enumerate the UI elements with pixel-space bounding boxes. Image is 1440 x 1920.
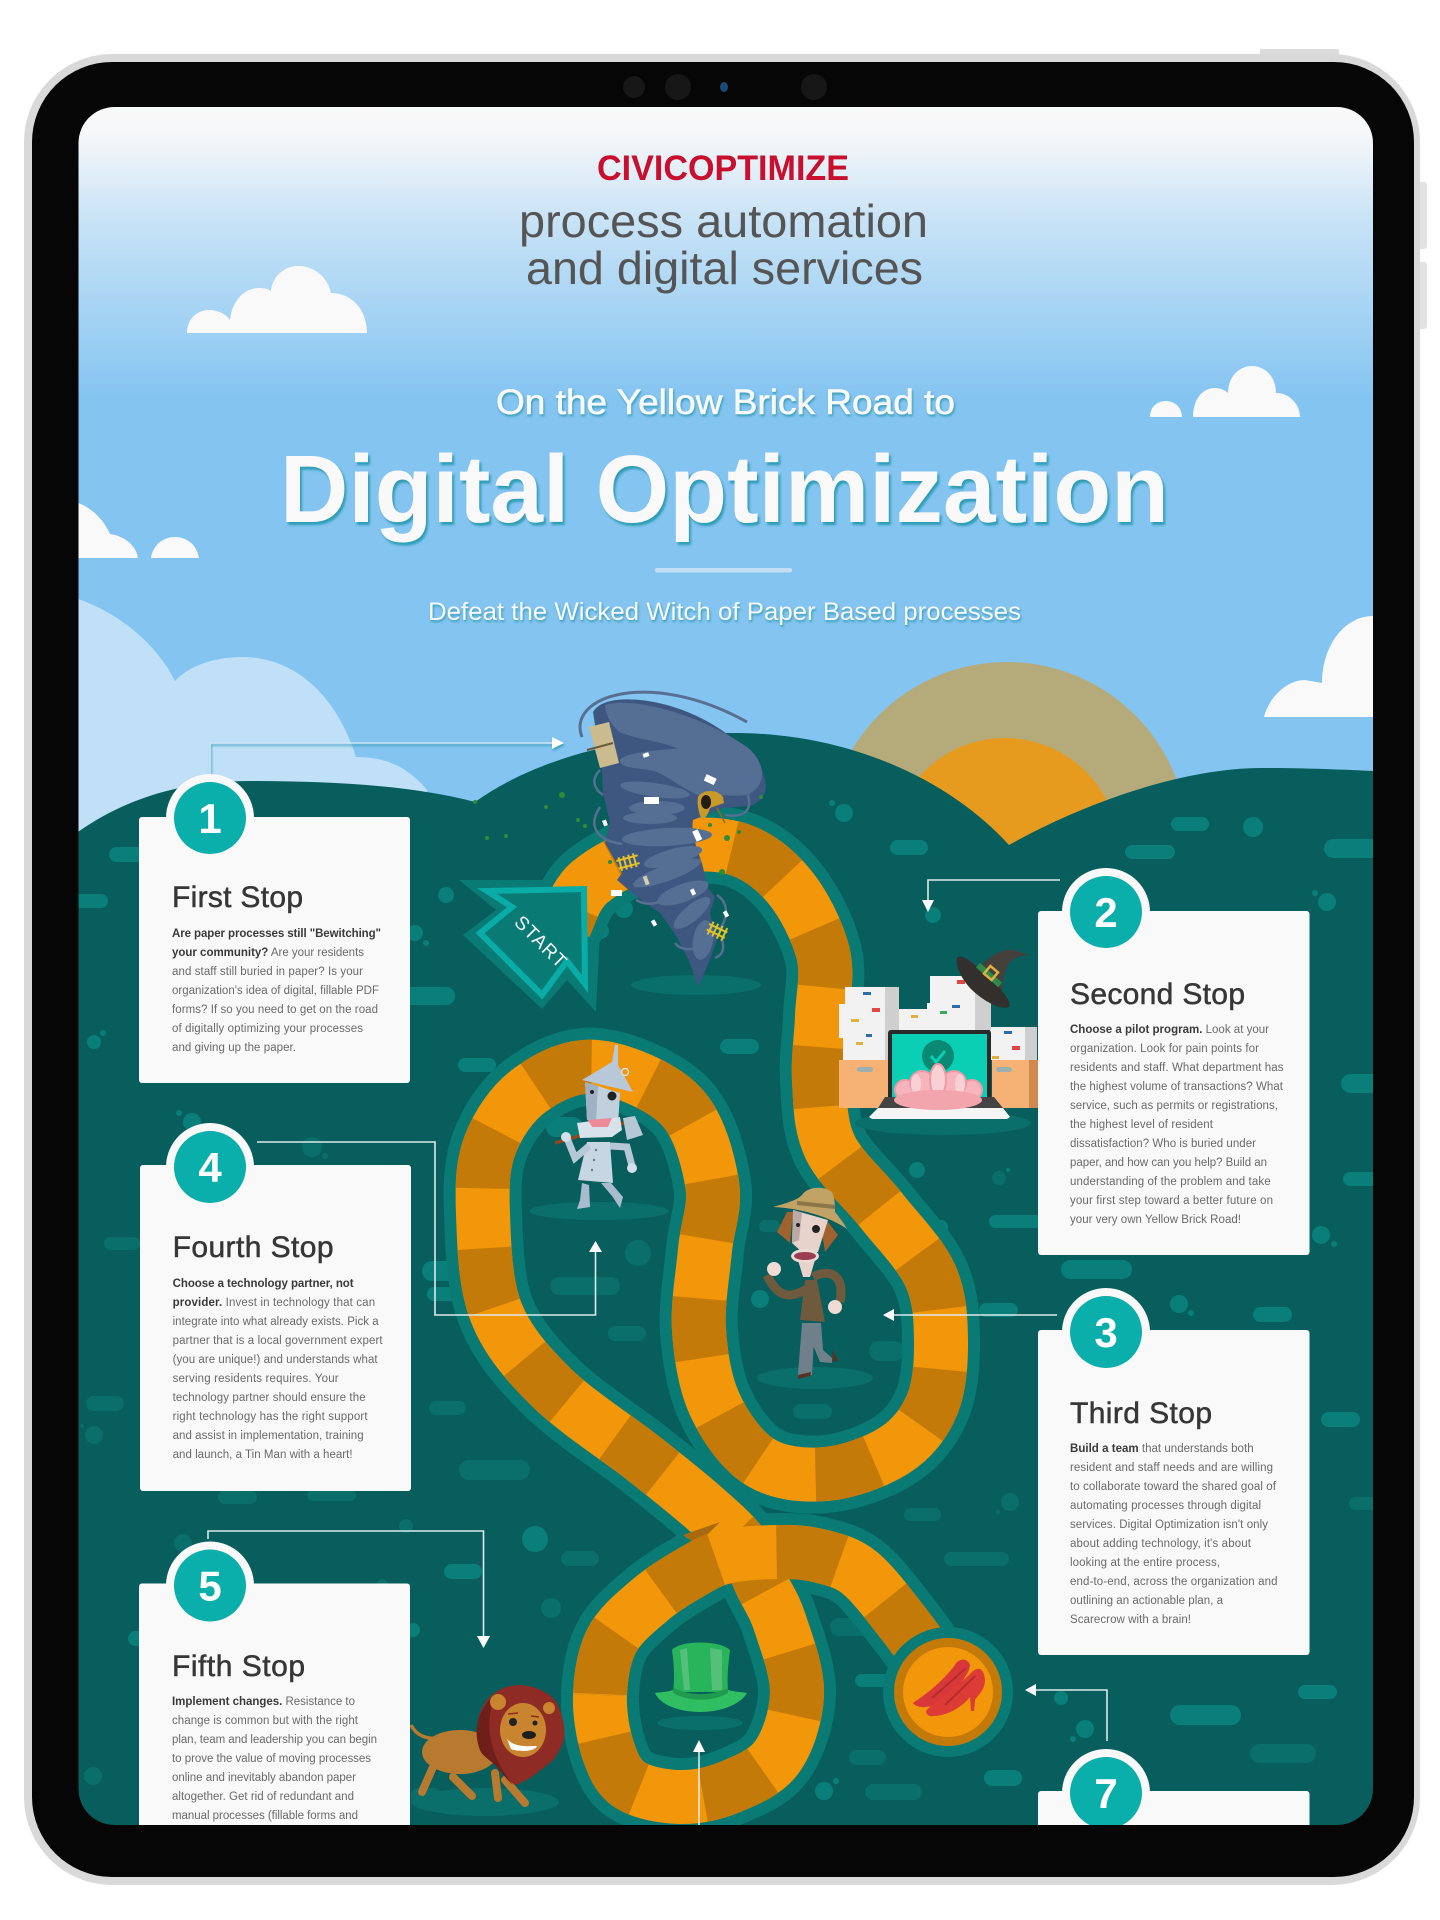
body text: and launch, a Tin Man with a heart! <box>173 1449 353 1461</box>
body text: Implement changes. Resistance to <box>172 1696 355 1708</box>
tagline: process automation <box>519 195 928 247</box>
body text: altogether. Get rid of redundant and <box>172 1791 354 1803</box>
body text <box>1070 1443 1278 1626</box>
tagline <box>519 195 928 294</box>
yellow brick road <box>483 844 948 1797</box>
start label: START <box>510 912 571 973</box>
file boxes <box>839 1060 888 1108</box>
badge 1: 1 <box>198 795 222 842</box>
body text: integrate into what already exists. Pick a <box>173 1316 379 1328</box>
funnel hat <box>582 1045 633 1092</box>
title divider <box>655 568 792 572</box>
green hills <box>78 733 1373 1825</box>
tiara <box>894 1064 982 1110</box>
heading: Third Stop <box>1070 1397 1212 1430</box>
arrow: first stop <box>210 737 564 775</box>
body text: to collaborate toward the shared goal of <box>1070 1481 1277 1493</box>
body text: looking at the entire process, <box>1070 1557 1220 1569</box>
icon: ruby slippers <box>913 1660 985 1716</box>
badge 1 <box>174 782 246 854</box>
pre-title: On the Yellow Brick Road to <box>496 383 955 422</box>
heading: Fifth Stop <box>172 1650 305 1683</box>
legs <box>422 1767 525 1803</box>
badge 2: 2 <box>1094 889 1118 936</box>
body text: the highest level of resident <box>1070 1119 1214 1131</box>
paper scraps <box>602 752 729 927</box>
paper stacks <box>839 976 1025 1060</box>
witch hat <box>957 950 1029 1008</box>
flying bucket <box>698 791 725 823</box>
body text: technology partner should ensure the <box>173 1392 366 1404</box>
body text: online and inevitably abandon paper <box>172 1772 356 1784</box>
arrow: third stop <box>883 1309 1057 1321</box>
body text <box>172 928 381 1054</box>
body text: and giving up the paper. <box>172 1042 296 1054</box>
body text: outlining an actionable plan, a <box>1070 1595 1224 1607</box>
body text: provider. Invest in technology that can <box>173 1297 375 1309</box>
badge 7: 7 <box>1094 1770 1118 1817</box>
body text: Choose a technology partner, not <box>173 1278 354 1290</box>
arrow: sixth stop <box>693 1740 705 1826</box>
green top hat <box>655 1642 747 1712</box>
paper stacks and laptop <box>839 950 1038 1119</box>
body text: your very own Yellow Brick Road! <box>1070 1214 1241 1226</box>
body text: serving residents requires. Your <box>173 1373 339 1385</box>
ruby slippers stop <box>883 1627 1013 1757</box>
body text: services. Digital Optimization isn't only <box>1070 1519 1268 1531</box>
cloud mid left <box>78 503 199 558</box>
card: first stop <box>139 774 410 1083</box>
body text: Scarecrow with a brain! <box>1070 1614 1191 1626</box>
tin man <box>555 1045 643 1209</box>
body text: dissatisfaction? Who is buried under <box>1070 1138 1256 1150</box>
sun <box>852 662 1176 845</box>
body text: of digitally optimizing your processes <box>172 1023 363 1035</box>
body text: service, such as permits or registrations, <box>1070 1100 1278 1112</box>
card: third stop <box>1038 1288 1310 1655</box>
badge 3 <box>1070 1296 1142 1368</box>
start arrow <box>480 889 585 995</box>
connector arrows <box>208 737 1107 1826</box>
scarecrow <box>767 1188 847 1379</box>
coat <box>800 1280 825 1322</box>
badge 5 <box>174 1550 246 1622</box>
body text: your first step toward a better future on <box>1070 1195 1273 1207</box>
body text: change is common but with the right <box>172 1715 359 1727</box>
body text: Are paper processes still "Bewitching" <box>172 928 381 940</box>
badge 5: 5 <box>198 1562 222 1610</box>
card: seventh stop <box>1038 1749 1310 1851</box>
body text: understanding of the problem and take <box>1070 1176 1271 1188</box>
body text: (you are unique!) and understands what <box>173 1354 378 1366</box>
cloud top left <box>187 266 367 333</box>
badge 7 <box>1070 1757 1142 1829</box>
body text: resident and staff needs and are willing <box>1070 1462 1273 1474</box>
laptop <box>888 1030 991 1100</box>
arrow: second stop <box>922 880 1060 912</box>
body text: right technology has the right support <box>173 1411 368 1423</box>
card: fifth stop <box>139 1542 410 1844</box>
leaves <box>473 792 763 875</box>
cloud top right <box>1150 366 1300 417</box>
body text <box>1070 1024 1284 1226</box>
badge 4 <box>174 1131 246 1203</box>
body text: to prove the value of moving processes <box>172 1753 371 1765</box>
card: second stop <box>1038 868 1310 1255</box>
body text: and assist in implementation, training <box>173 1430 364 1442</box>
heading: Fourth Stop <box>173 1231 334 1264</box>
large pale cloud <box>78 599 427 832</box>
body <box>422 1730 498 1774</box>
arrow: seventh stop <box>1025 1684 1107 1741</box>
arms <box>767 1275 810 1295</box>
axe <box>555 1122 627 1143</box>
arms <box>567 1138 589 1158</box>
face <box>792 1210 828 1253</box>
front cameras <box>623 74 827 100</box>
flying fences <box>616 852 729 942</box>
body text <box>172 1696 377 1822</box>
hair <box>777 1212 793 1243</box>
body text: organization. Look for pain points for <box>1070 1043 1259 1055</box>
ground shadows <box>411 975 1031 1816</box>
tornado <box>473 692 766 987</box>
badge 4: 4 <box>198 1144 222 1191</box>
jaw <box>577 1117 622 1138</box>
body text: residents and staff. What department has <box>1070 1062 1284 1074</box>
body text: automating processes through digital <box>1070 1500 1261 1512</box>
body text: partner that is a local government expert <box>173 1335 383 1347</box>
main title: Digital Optimization <box>280 436 1169 543</box>
body text: paper, and how can you help? Build an <box>1070 1157 1267 1169</box>
neck <box>798 1260 815 1277</box>
body text: and staff still buried in paper? Is your <box>172 966 363 978</box>
cloud mid right <box>1264 616 1373 717</box>
tail <box>411 1725 437 1739</box>
body text: manual processes (fillable forms and <box>172 1810 358 1822</box>
legs <box>577 1183 623 1209</box>
body text: plan, team and leadership you can begin <box>172 1734 377 1746</box>
body text: Build a team that understands both <box>1070 1443 1254 1455</box>
body text <box>173 1278 383 1461</box>
logo: CIVICOPTIMIZE <box>597 149 849 188</box>
card: fourth stop <box>140 1123 411 1491</box>
body text: about adding technology, it's about <box>1070 1538 1252 1550</box>
badge 2 <box>1070 876 1142 948</box>
start arrow outer shape <box>459 880 600 1012</box>
body text: Choose a pilot program. Look at your <box>1070 1024 1269 1036</box>
heading: Second Stop <box>1070 978 1245 1011</box>
arrow: fourth stop <box>257 1142 602 1315</box>
face <box>490 1694 506 1710</box>
body text: end-to-end, across the organization and <box>1070 1576 1278 1588</box>
sky <box>78 107 1373 802</box>
body text: your community? Are your residents <box>172 947 364 959</box>
tagline: and digital services <box>526 242 923 294</box>
straw hat <box>773 1188 847 1229</box>
cowardly lion <box>411 1685 565 1803</box>
body text: forms? If so you need to get on the road <box>172 1004 378 1016</box>
flying box <box>587 722 619 768</box>
legs <box>798 1323 815 1375</box>
body <box>578 1142 613 1183</box>
head <box>585 1082 620 1120</box>
mane <box>477 1685 565 1785</box>
subtitle: Defeat the Wicked Witch of Paper Based processes <box>428 598 1021 626</box>
heading: First Stop <box>172 881 303 914</box>
verified badge <box>922 1040 954 1072</box>
arrow: fifth stop <box>208 1531 490 1648</box>
background muted pills and dots <box>80 1137 1379 1803</box>
body text: organization's idea of digital, fillable PDF <box>172 985 379 997</box>
background bright pills and dots <box>70 800 1384 1800</box>
body text: the highest volume of transactions? What <box>1070 1081 1284 1093</box>
badge 3: 3 <box>1094 1309 1118 1356</box>
